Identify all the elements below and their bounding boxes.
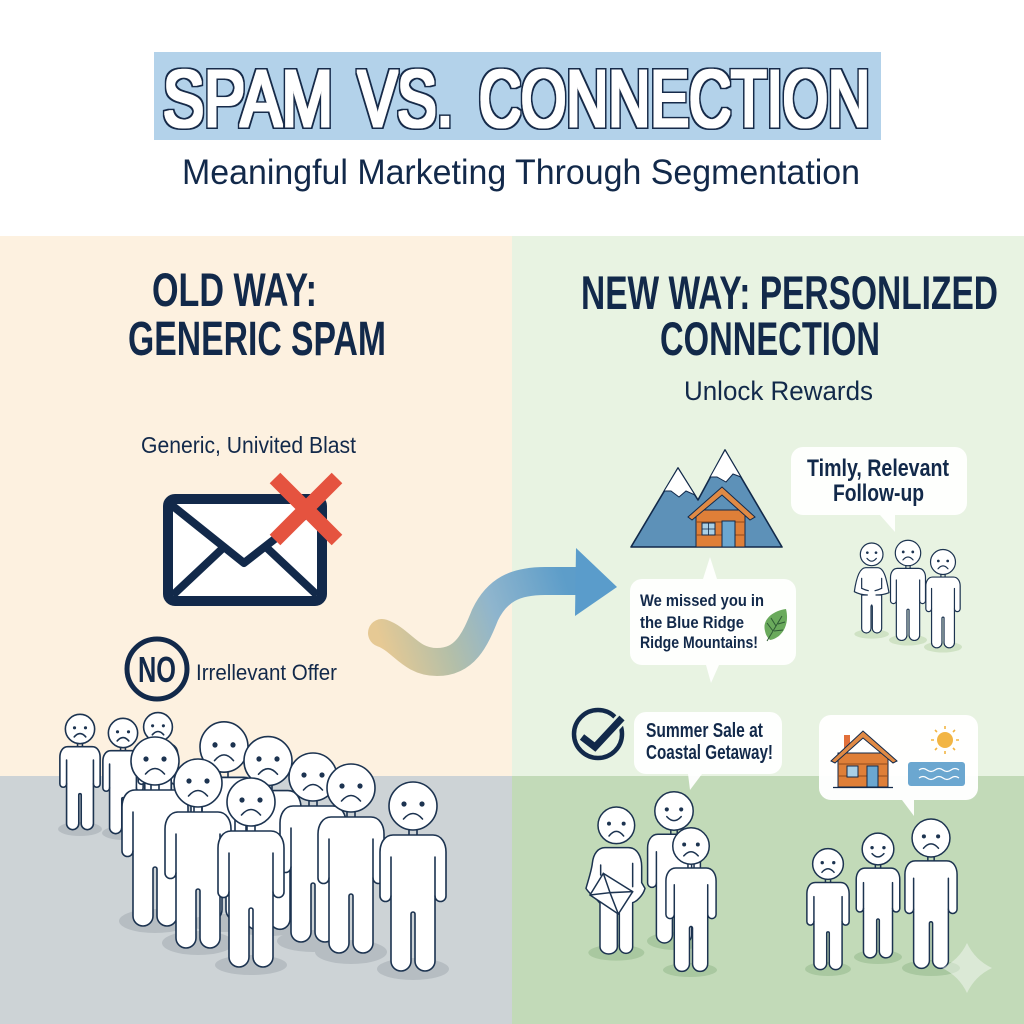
figure: happy behind (647, 792, 705, 950)
figure: happy with folded arms (854, 543, 889, 639)
callout: summer sale (634, 712, 782, 790)
icon: check mark badge (574, 710, 622, 758)
figure: centre front (215, 778, 287, 975)
figure: left front (119, 737, 191, 933)
figure: back centre (190, 722, 258, 932)
title banner: SPAM (163, 54, 333, 143)
title banner (154, 52, 881, 143)
icon: sun (931, 726, 959, 754)
text: unlock rewards: Unlock Rewards (684, 376, 873, 406)
figure: sad right (902, 819, 960, 976)
heading: new way (581, 266, 998, 365)
callout: timely follow-up (791, 447, 967, 532)
callout: blue ridge message (630, 557, 796, 683)
figure: small back left (58, 714, 102, 836)
text: irrelevant offer: Irrellevant Offer (196, 660, 337, 685)
title banner: VS. (358, 54, 453, 143)
icon: no badge (127, 639, 187, 699)
figure: right (315, 764, 387, 964)
arrow: spam to connection (382, 548, 617, 662)
heading: old way: OLD WAY: (152, 263, 317, 316)
icon: leaf (764, 609, 787, 641)
group: small trio (854, 540, 962, 652)
heading: old way (128, 263, 386, 366)
group: envelope holder with friends (586, 792, 717, 977)
figure: sad front (663, 828, 717, 977)
icon: sparkle (942, 943, 992, 993)
icon: cabin (831, 731, 897, 788)
crowd: unhappy recipients (58, 713, 449, 980)
subtitle: Meaningful Marketing Through Segmentation (182, 153, 860, 192)
group: coastal trio (805, 819, 960, 976)
callout: blue ridge message: Ridge Mountains! (640, 633, 758, 652)
title banner: CONNECTION (479, 54, 870, 143)
panel: new way background (512, 236, 1024, 1024)
callout: blue ridge message: the Blue Ridge (640, 613, 744, 632)
figure: small back right (138, 713, 178, 826)
callout: summer sale: Summer Sale at (646, 720, 763, 742)
callout: coastal cabin picture (819, 715, 978, 816)
heading: new way: CONNECTION (660, 312, 880, 365)
icon: mountains with cabin (631, 450, 782, 547)
icon: water (908, 762, 965, 786)
figure: sad holding envelope (586, 807, 645, 961)
callout: timely follow-up: Timly, Relevant (807, 455, 949, 482)
icon: crossed-out envelope (168, 478, 337, 601)
text: generic blast: Generic, Univited Blast (141, 432, 357, 458)
callout: summer sale: Coastal Getaway! (646, 742, 773, 764)
callout: blue ridge message: We missed you in (640, 591, 764, 610)
callout: timely follow-up: Follow-up (833, 480, 924, 507)
figure: sad left (805, 849, 851, 976)
figure: centre left (162, 759, 234, 955)
figure: sad right (924, 550, 962, 652)
figure: sad middle (889, 540, 927, 646)
figure: right-centre (277, 753, 349, 952)
figure: back right-centre (234, 737, 302, 936)
icon: no badge: NO (138, 649, 176, 690)
heading: old way: GENERIC SPAM (128, 313, 386, 366)
figure: small back middle (102, 718, 146, 840)
figure: happy centre (854, 833, 902, 964)
panel: old way background (0, 236, 512, 1024)
figure: far right (377, 782, 449, 980)
